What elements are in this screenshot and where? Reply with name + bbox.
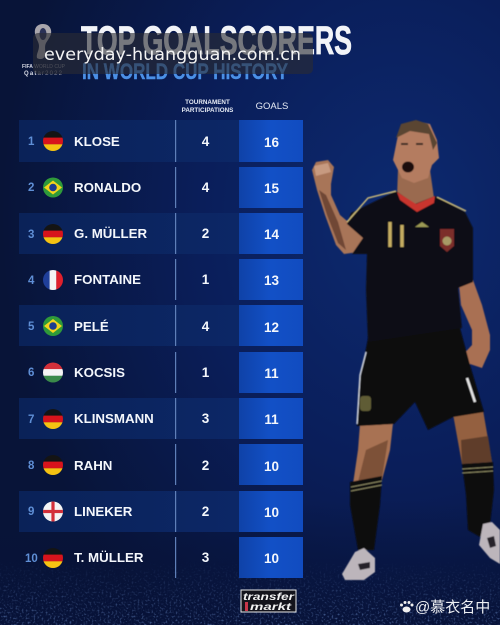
row 7: Klinsmann: KLINSMANN — [74, 411, 154, 426]
row 8: Rahn: 10 — [264, 459, 279, 474]
row 6: Kocsis: KOCSIS — [74, 365, 125, 380]
row 9: Lineker — [19, 491, 303, 532]
watermark banner: everyday-huangguan.com.cn — [44, 45, 301, 65]
row 2: Ronaldo: 4 — [202, 180, 210, 195]
row 8: Rahn: 8 — [28, 460, 35, 472]
column headers: PARTICIPATIONS — [182, 107, 233, 114]
transfermarkt logo — [241, 590, 296, 613]
row 1: Klose: KLOSE — [74, 134, 120, 149]
transfermarkt logo: markt — [250, 601, 292, 613]
player illustration — [312, 120, 500, 580]
column headers: GOALS — [256, 101, 288, 112]
row 1: Klose — [19, 120, 303, 162]
eyes — [401, 143, 423, 145]
row 6: Kocsis: 11 — [264, 366, 279, 381]
row 5: Pelé: 4 — [202, 319, 210, 334]
logo: FIFA World Cup Qatar 2022: FIFA WORLD CUP — [22, 64, 66, 70]
neck — [397, 170, 434, 208]
title: TOP GOALSCORERS — [81, 19, 352, 63]
row 9: Lineker: 2 — [202, 504, 209, 519]
row 1: Klose: 16 — [264, 135, 279, 150]
jersey — [347, 191, 473, 342]
row 8: Rahn: RAHN — [74, 458, 112, 473]
row 10: T. Müller: 10 — [25, 553, 38, 565]
shoulder stripes — [347, 191, 466, 222]
row 5: Pelé: 5 — [28, 321, 35, 333]
hair — [396, 120, 437, 150]
row 10: T. Müller — [25, 537, 303, 578]
row 5: Pelé — [19, 305, 303, 346]
watermark banner — [33, 33, 313, 74]
row 4: Fontaine: 13 — [264, 273, 279, 288]
row 4: Fontaine: FONTAINE — [74, 272, 141, 287]
shorts badge — [360, 396, 371, 411]
logo: FIFA World Cup Qatar 2022: Qatar2022 — [24, 71, 63, 77]
shorts — [357, 328, 484, 430]
row 7: Klinsmann: 3 — [202, 411, 210, 426]
crest — [440, 229, 454, 252]
row 9: Lineker: LINEKER — [74, 504, 133, 519]
shirt number 11 — [390, 222, 402, 247]
row 7: Klinsmann: 7 — [28, 414, 34, 426]
row 8: Rahn — [28, 444, 303, 485]
column headers: TOURNAMENT — [185, 99, 230, 106]
right arm — [459, 280, 490, 368]
row 6: Kocsis: 1 — [202, 365, 210, 380]
adidas logo — [415, 222, 429, 227]
row 4: Fontaine — [28, 259, 303, 300]
row 10: T. Müller: 10 — [264, 551, 279, 566]
column headers — [182, 99, 288, 114]
row 6: Kocsis — [28, 352, 303, 393]
boots — [342, 548, 375, 580]
collar — [397, 192, 435, 212]
row 10: T. Müller: 3 — [202, 550, 210, 565]
row 4: Fontaine: 1 — [202, 272, 210, 287]
row 3: G. Müller: G. MÜLLER — [74, 226, 148, 241]
right leg — [453, 410, 492, 464]
ranking table — [19, 120, 303, 578]
logo: FIFA World Cup Qatar 2022 — [22, 24, 66, 77]
row 5: Pelé: 12 — [264, 320, 279, 335]
row 5: Pelé: PELÉ — [74, 319, 109, 334]
title: IN WORLD CUP HISTORY — [82, 59, 288, 84]
row 1: Klose: 1 — [28, 136, 35, 148]
row 2: Ronaldo: RONALDO — [74, 180, 141, 195]
row 8: Rahn: 2 — [202, 458, 209, 473]
socks — [350, 476, 382, 550]
row 2: Ronaldo: 2 — [28, 182, 34, 194]
row 9: Lineker: 10 — [264, 505, 279, 520]
row 3: G. Müller: 2 — [202, 226, 209, 241]
mouth — [402, 162, 414, 172]
row 3: G. Müller: 14 — [264, 227, 279, 242]
left leg — [353, 423, 393, 484]
row 7: Klinsmann — [19, 398, 303, 439]
raised arm — [312, 160, 364, 254]
row 10: T. Müller: T. MÜLLER — [74, 550, 144, 565]
row 3: G. Müller — [19, 213, 303, 254]
head — [393, 121, 439, 183]
transfermarkt logo: transfer — [243, 591, 295, 603]
row 9: Lineker: 9 — [28, 506, 34, 518]
row 2: Ronaldo: 15 — [264, 181, 279, 196]
row 3: G. Müller: 3 — [28, 229, 34, 241]
row 2: Ronaldo — [28, 167, 303, 208]
watermark: author handle: @慕衣名中 — [415, 599, 490, 616]
row 4: Fontaine: 4 — [28, 275, 35, 287]
row 1: Klose: 4 — [202, 134, 210, 149]
row 7: Klinsmann: 11 — [264, 412, 279, 427]
title — [81, 19, 352, 84]
row 6: Kocsis: 6 — [28, 367, 34, 379]
